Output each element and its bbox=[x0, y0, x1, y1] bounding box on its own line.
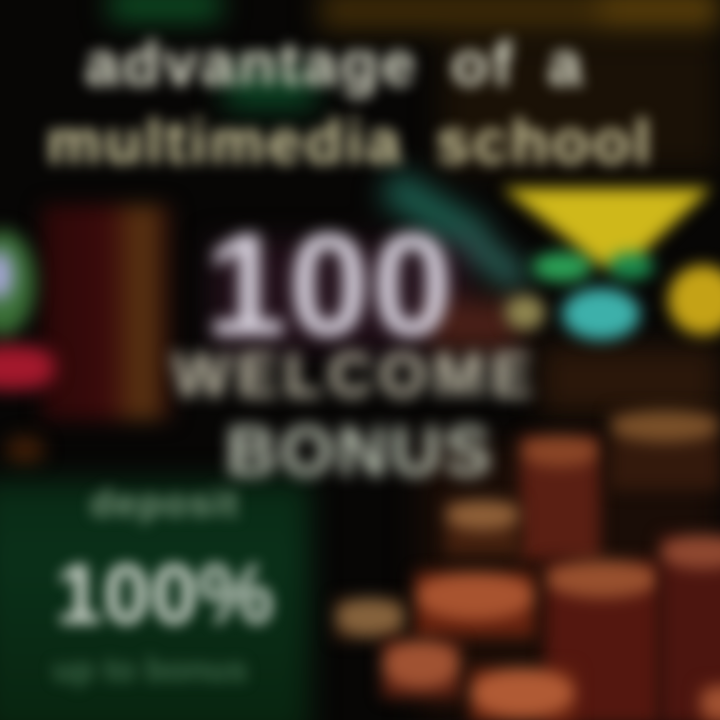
text: panel 100 percent: 100% bbox=[56, 547, 274, 641]
text: panel caption: deposit bbox=[90, 483, 240, 525]
text: bonus line: BONUS bbox=[226, 412, 494, 490]
text: panel footnote: up to bonus bbox=[53, 651, 247, 689]
heading: title line one: advantage of a bbox=[85, 30, 585, 99]
panel: green bonus panel bbox=[0, 480, 310, 720]
text: big 100 figure: 100 bbox=[205, 203, 455, 366]
chart: stacks of red casino chips bbox=[324, 400, 720, 720]
icon: yellow ceiling lamp bbox=[496, 175, 720, 352]
heading: title line two: multimedia school bbox=[46, 108, 654, 177]
panel: dark red pillar bbox=[42, 205, 172, 420]
text: welcome line: WELCOME bbox=[172, 341, 538, 410]
icon: left wheel bbox=[0, 220, 66, 470]
